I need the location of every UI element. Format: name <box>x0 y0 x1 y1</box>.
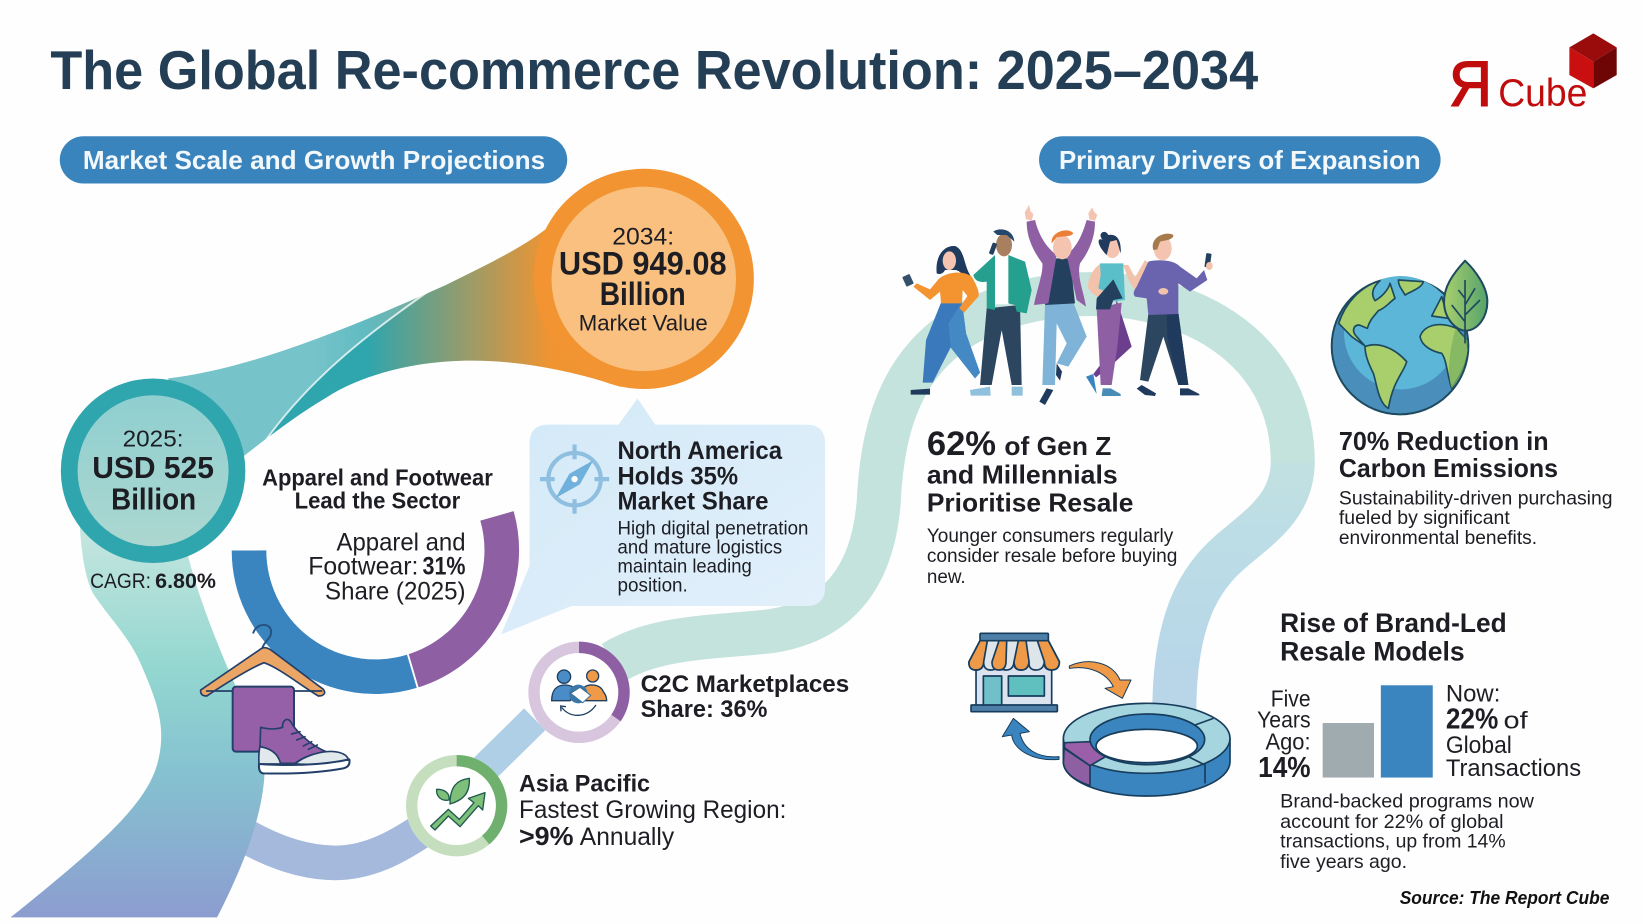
river: branch Asia Pacific to C2C <box>467 719 535 786</box>
heading: apparel and footwear <box>262 464 493 514</box>
person 2: man in green jacket <box>970 229 1032 396</box>
icon: handshake people <box>552 670 607 715</box>
text: C2C marketplaces: Share: 36% <box>641 696 767 723</box>
callout: North America: Market Share <box>618 488 769 516</box>
text: brand-backed description: Brand-backed programs now <box>1280 790 1535 812</box>
text: C2C marketplaces <box>641 671 849 723</box>
CAGR label <box>90 570 216 593</box>
icon: hanger, towel and sneaker <box>201 625 350 774</box>
logo: RCube <box>1449 33 1617 120</box>
bar chart: brand-led share: Ago: <box>1266 729 1311 755</box>
CAGR label: 6.80% <box>155 570 216 593</box>
bar chart: brand-led share: 14% <box>1258 751 1311 783</box>
arrow: ring to store <box>1002 718 1059 760</box>
section heading: market scale: Market Scale and Growth Projections <box>83 145 545 175</box>
donut chart: apparel share <box>249 516 502 690</box>
illustration: store and resale ring <box>969 633 1230 796</box>
person 1: woman in orange <box>902 246 980 395</box>
heading: apparel and footwear: Apparel and Footwear <box>262 464 493 490</box>
callout: North America: Holds 35% <box>618 462 738 490</box>
text: Asia Pacific: Annually <box>580 824 675 851</box>
text: brand-backed description: transactions, up from 14% <box>1280 831 1506 853</box>
ring icon: C2C marketplaces <box>528 642 630 743</box>
circle: 2034 value: USD 949.08 <box>559 246 727 282</box>
illustration: globe with leaf <box>1332 261 1487 414</box>
ring icon: Asia Pacific <box>406 755 507 856</box>
circle: 2025 value: USD 525 <box>92 451 214 485</box>
section heading: primary drivers <box>1039 136 1441 183</box>
river: lower branch to Asia Pacific <box>210 813 440 863</box>
bar chart: brand-led share: Global <box>1446 732 1512 759</box>
donut label: Share (2025) <box>325 579 466 606</box>
logo: RCube: Cube <box>1498 72 1587 115</box>
person 5: man in violet sweater <box>1134 234 1213 396</box>
bar chart: brand-led share <box>1257 680 1581 783</box>
text: Asia Pacific: Asia Pacific <box>519 771 650 798</box>
callout: North America: High digital penetration <box>618 518 808 540</box>
river: descent to resale ring <box>1174 461 1293 713</box>
text: carbon reduction: fueled by significant <box>1339 507 1510 529</box>
circle: 2034 value: 2034: <box>612 223 674 250</box>
illustration: five young consumers <box>902 205 1213 405</box>
text: Gen Z stat: Younger consumers regularly <box>927 525 1174 547</box>
circle: 2025 value: 2025: <box>123 426 183 452</box>
section heading: market scale <box>60 136 567 183</box>
icon: resale ring <box>1063 703 1230 796</box>
CAGR label: CAGR: <box>90 570 151 593</box>
text: brand-backed description: account for 22% of global <box>1280 811 1504 833</box>
section heading: primary drivers: Primary Drivers of Expansion <box>1059 145 1421 175</box>
circle: 2025 value <box>61 378 245 563</box>
text: Gen Z stat: consider resale before buying <box>927 545 1177 567</box>
callout: North America: maintain leading <box>618 555 752 577</box>
river: green arch over people <box>613 294 1293 663</box>
text: carbon reduction: Carbon Emissions <box>1339 453 1558 483</box>
bar chart: brand-led share: 22% <box>1446 703 1498 735</box>
heading: brand-led resale <box>1280 607 1507 667</box>
circle: 2034 value: Market Value <box>579 310 708 335</box>
icon: compass <box>540 445 609 514</box>
circle: 2025 value: Billion <box>111 483 196 517</box>
bar chart: brand-led share: Transactions <box>1446 755 1581 782</box>
text: carbon reduction: 70% Reduction in <box>1339 426 1549 456</box>
text: carbon reduction: environmental benefits. <box>1339 527 1537 549</box>
text: C2C marketplaces: C2C Marketplaces <box>641 671 849 698</box>
callout: North America: position. <box>618 574 688 596</box>
circle: 2034 value <box>534 169 754 389</box>
logo: RCube: Я <box>1449 48 1492 120</box>
callout: North America: North America <box>618 437 783 465</box>
circle: 2034 value: Billion <box>600 276 686 312</box>
icon: storefront <box>969 633 1059 712</box>
heading: brand-led resale: Resale Models <box>1280 636 1465 667</box>
icon: growth arrow and leaves <box>431 778 485 830</box>
person 4: woman in teal top <box>1086 232 1151 396</box>
text: Gen Z stat: new. <box>927 566 966 588</box>
continents <box>1339 280 1468 408</box>
donut label: Apparel and <box>337 529 466 556</box>
bar chart: brand-led share: Years <box>1257 707 1311 733</box>
text: Asia Pacific <box>519 771 786 851</box>
donut label: 31% <box>423 554 466 581</box>
text: Gen Z stat <box>927 425 1177 588</box>
text: Asia Pacific: >9% <box>519 821 574 851</box>
title: The Global Re-commerce Revolution: 2025–2034 <box>50 40 1259 101</box>
river: main band <box>10 514 264 917</box>
text: Gen Z stat: and Millennials <box>927 459 1118 489</box>
person 3: man with raised arms <box>1025 205 1097 405</box>
text: brand-backed description <box>1280 790 1535 873</box>
text: Asia Pacific: Fastest Growing Region: <box>519 797 786 824</box>
growth funnel <box>168 230 644 461</box>
text: Gen Z stat: Prioritise Resale <box>927 488 1133 518</box>
callout: North America <box>501 398 825 634</box>
text: brand-backed description: five years ago. <box>1280 851 1407 873</box>
callout: North America: and mature logistics <box>618 537 782 559</box>
bar chart: brand-led share: Five <box>1271 686 1311 712</box>
donut label: Footwear: <box>308 554 418 581</box>
arrow: store to ring <box>1069 662 1131 698</box>
heading: brand-led resale: Rise of Brand-Led <box>1280 607 1507 638</box>
donut label <box>308 529 466 606</box>
text: Gen Z stat: of Gen Z <box>1004 431 1111 461</box>
text: carbon reduction: Sustainability-driven purchasing <box>1339 487 1613 509</box>
bar chart: brand-led share: of <box>1504 708 1528 735</box>
heading: apparel and footwear: Lead the Sector <box>295 488 460 514</box>
text: carbon reduction <box>1339 426 1613 549</box>
bar chart: brand-led share: Now: <box>1446 680 1500 707</box>
source note: Source: The Report Cube <box>1400 887 1609 908</box>
text: Gen Z stat: 62% <box>927 425 996 463</box>
